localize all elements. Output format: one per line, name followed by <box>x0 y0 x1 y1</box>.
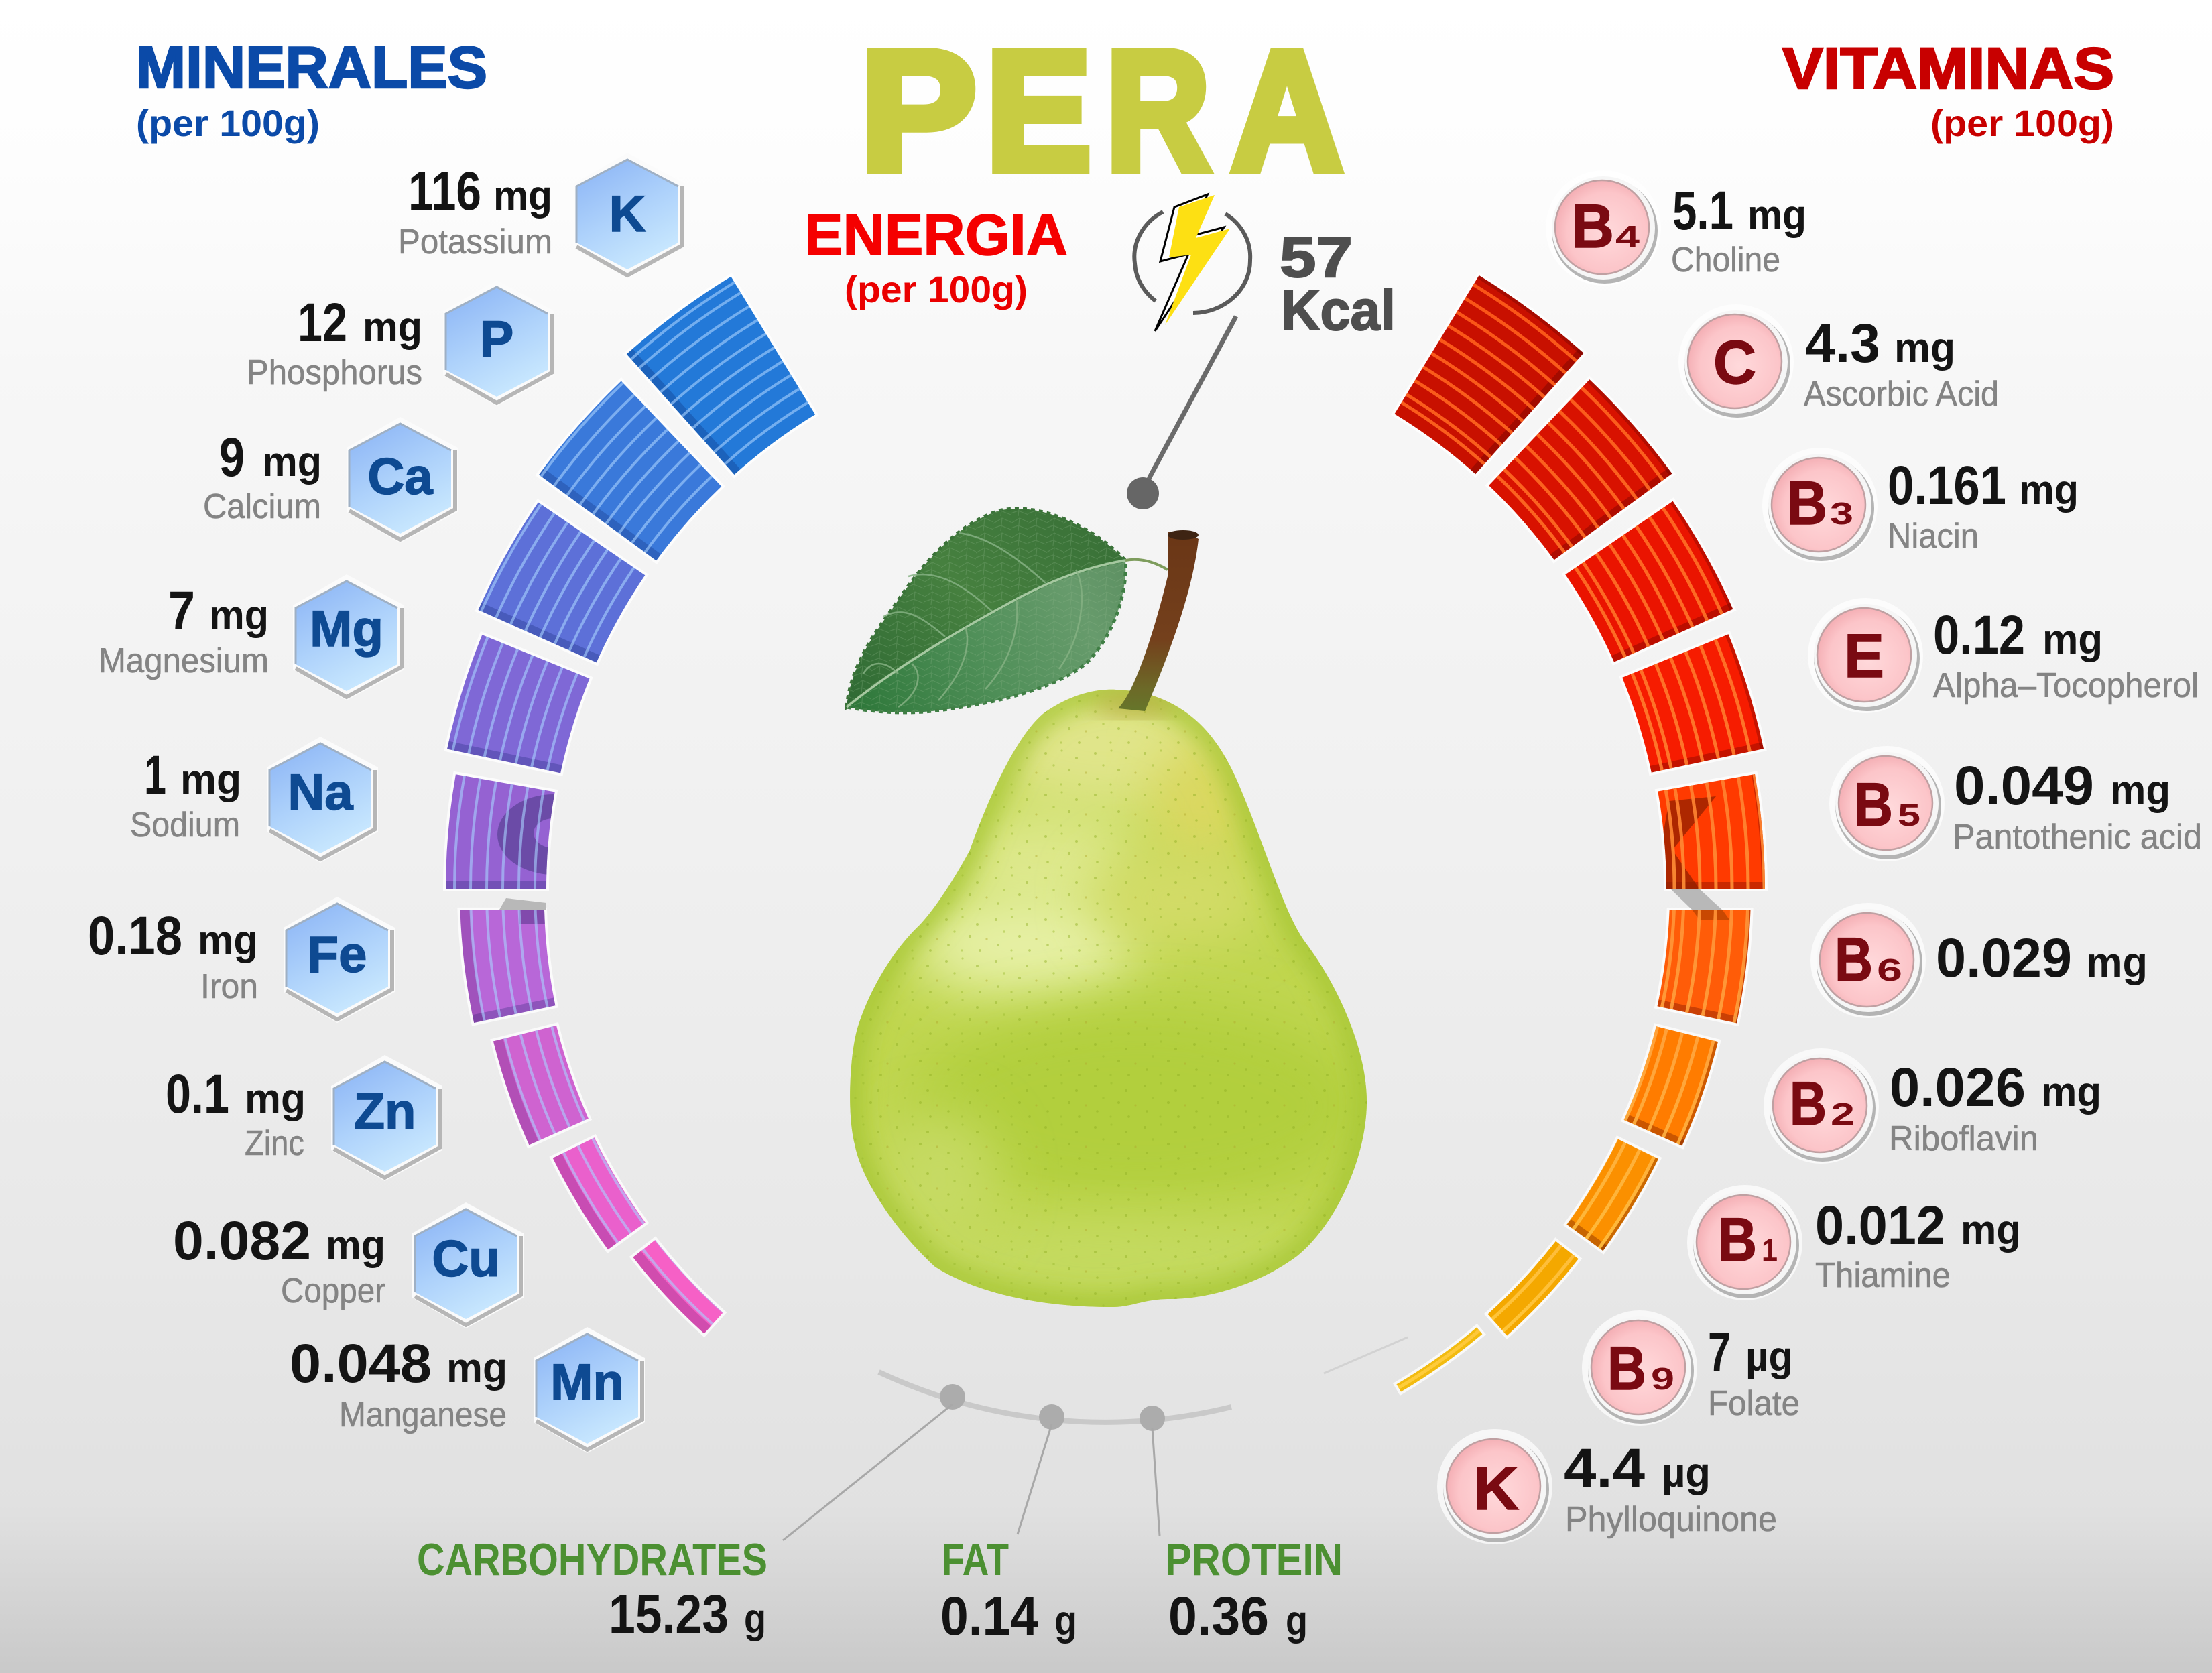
mineral: sodium: Sodium <box>130 806 240 845</box>
mineral: manganese: mg <box>446 1345 507 1391</box>
vitamin: b1 thiamine: B <box>1718 1206 1757 1274</box>
vitamin: c ascorbic acid <box>1678 304 1999 420</box>
mineral: phosphorus: P <box>480 311 513 368</box>
bar: alpha tocopherol <box>1622 634 1764 773</box>
vitamin: b4 choline: 5.1 <box>1672 180 1733 241</box>
mineral: calcium: mg <box>262 439 322 485</box>
mineral: iron: Fe <box>308 926 367 983</box>
title: A <box>1231 15 1343 205</box>
vitamin: b2 riboflavin: mg <box>2041 1069 2101 1115</box>
panel: vitamins header <box>1782 36 2114 144</box>
mineral: potassium <box>398 153 685 279</box>
mineral: phosphorus <box>247 280 554 406</box>
mineral: copper <box>173 1202 524 1328</box>
minerals per 100g note: (per 100g) <box>136 102 320 144</box>
mineral: potassium: Potassium <box>398 223 552 261</box>
pear body <box>845 677 1374 1314</box>
mineral: calcium: Calcium <box>203 487 321 526</box>
watermark fragment between sodium and iron bars <box>499 898 546 910</box>
vitamin: b5 pantothenic acid: 0.049 <box>1954 755 2094 816</box>
vitamin: b9 folate: 9 <box>1651 1361 1674 1396</box>
mineral: iron <box>88 897 395 1023</box>
mineral: calcium: Ca <box>367 448 433 505</box>
bar: folate <box>1487 1241 1579 1336</box>
vitamin: b4 choline <box>1546 170 1806 286</box>
macronutrient: protein: 0.36 <box>1168 1586 1269 1647</box>
vitamin: b6: 0.029 <box>1936 928 2072 989</box>
vitamin: e alpha tocopherol <box>1808 598 2199 713</box>
vitamin: b1 thiamine: mg <box>1961 1207 2021 1253</box>
vitamin: b3 niacin: mg <box>2019 467 2079 513</box>
mineral: copper: Cu <box>432 1231 500 1288</box>
mineral: copper: 0.082 <box>173 1211 311 1272</box>
macronutrient: protein: g <box>1286 1598 1308 1644</box>
vitamin: b2 riboflavin: Riboflavin <box>1889 1119 2038 1158</box>
minerals heading: MINERALES <box>136 34 487 101</box>
vitamin: b3 niacin: 3 <box>1830 496 1853 531</box>
icon: lightning bolt in ring <box>1134 194 1250 331</box>
panel: macronutrients <box>417 1337 1408 1647</box>
mineral: manganese: 0.048 <box>290 1333 432 1394</box>
chart: minerals ring bars <box>446 277 815 1334</box>
bar: zinc <box>493 1026 589 1145</box>
macronutrient: carbohydrates: CARBOHYDRATES <box>417 1534 767 1585</box>
bar: potassium <box>627 277 815 475</box>
bar: ascorbic acid <box>1489 379 1672 560</box>
vitamin: e alpha tocopherol: 0.12 <box>1933 605 2025 666</box>
mineral: zinc: Zn <box>354 1083 416 1140</box>
vitamin: b9 folate: Folate <box>1708 1384 1800 1423</box>
chart detail: minerals bar shading, stripes and watermark <box>446 282 808 1334</box>
illustration: pear with leaf <box>845 509 1374 1314</box>
list: minerals <box>88 153 685 1453</box>
vitamin: b6 <box>1810 903 2148 1018</box>
macronutrient: fat: g <box>1054 1598 1077 1644</box>
bar: sodium <box>446 774 555 889</box>
list: vitamins <box>1437 170 2202 1544</box>
mineral: magnesium: Magnesium <box>99 641 269 680</box>
bar: riboflavin <box>1624 1026 1718 1146</box>
leaf <box>847 509 1125 712</box>
energy value: 57 <box>1280 226 1353 289</box>
vitamin: b2 riboflavin: 0.026 <box>1890 1057 2026 1118</box>
bar: calcium <box>479 503 645 662</box>
vitamin: b2 riboflavin <box>1764 1048 2101 1164</box>
energy heading: ENERGIA <box>804 203 1068 267</box>
title: E <box>986 15 1091 205</box>
bar: thiamine <box>1566 1139 1658 1251</box>
bar: niacin <box>1565 501 1733 662</box>
bar: phylloquinone <box>1396 1327 1482 1391</box>
vitamin: b5 pantothenic acid: Pantothenic acid <box>1953 818 2202 857</box>
vitamin: k phylloquinone: µg <box>1662 1450 1711 1496</box>
bar: choline <box>1394 275 1583 474</box>
vitamin: k phylloquinone <box>1437 1429 1777 1544</box>
mineral: sodium: Na <box>288 764 353 821</box>
mineral: manganese <box>290 1327 645 1453</box>
vitamin: b5 pantothenic acid: mg <box>2110 767 2170 814</box>
vitamin: e alpha tocopherol: E <box>1844 622 1884 690</box>
vitamin: k phylloquinone: K <box>1473 1454 1519 1523</box>
title: R <box>1106 15 1210 205</box>
energy pointer line and dot <box>1127 316 1236 509</box>
bar: copper <box>553 1137 646 1249</box>
vitamin: b3 niacin <box>1762 448 2079 563</box>
vitamin: b3 niacin: 0.161 <box>1888 455 2006 516</box>
vitamin: b3 niacin: B <box>1787 469 1827 538</box>
mineral: phosphorus: mg <box>363 304 422 351</box>
bar: b6 <box>1657 910 1751 1023</box>
macronutrient: carbohydrates <box>417 1534 767 1645</box>
panel: energy <box>804 194 1396 509</box>
mineral: phosphorus: Phosphorus <box>247 353 422 392</box>
vitamin: c ascorbic acid: Ascorbic Acid <box>1804 375 1999 414</box>
vitamins per 100g note: (per 100g) <box>1930 102 2114 144</box>
vitamin: b1 thiamine <box>1687 1185 2021 1300</box>
vitamin: c ascorbic acid: C <box>1713 328 1756 397</box>
mineral: magnesium: mg <box>209 593 269 639</box>
mineral: sodium: mg <box>180 757 241 803</box>
bar: phosphorus <box>539 381 721 560</box>
mineral: copper: Copper <box>281 1272 385 1310</box>
watermark fragment between b5 and b6 bars <box>1670 889 1723 910</box>
bar: manganese <box>633 1240 723 1334</box>
macronutrient arc with nodes <box>783 1337 1408 1540</box>
vitamin: b9 folate: 7 <box>1708 1322 1731 1383</box>
macronutrient: carbohydrates: 15.23 <box>609 1584 729 1645</box>
vitamin: b6: 6 <box>1877 952 1902 987</box>
mineral: calcium <box>203 417 458 543</box>
macronutrient: fat: FAT <box>942 1534 1009 1585</box>
bar: magnesium <box>447 635 590 773</box>
mineral: sodium: 1 <box>144 745 166 806</box>
vitamin: b1 thiamine: 1 <box>1762 1233 1778 1267</box>
vitamin: b4 choline: Choline <box>1671 241 1780 280</box>
vitamin: b4 choline: 4 <box>1615 219 1640 254</box>
energy value <box>1280 226 1396 342</box>
mineral: calcium: 9 <box>219 427 245 488</box>
vitamin: b6: mg <box>2086 940 2148 986</box>
vitamin: k phylloquinone: 4.4 <box>1564 1438 1645 1499</box>
bar: pantothenic acid <box>1658 774 1765 889</box>
vitamin: b2 riboflavin: 2 <box>1831 1097 1855 1131</box>
vitamin: b5 pantothenic acid: B <box>1854 771 1893 839</box>
mineral: potassium: mg <box>493 173 552 219</box>
chart detail: vitamins bar shading, stripes and watermark <box>1398 275 1765 1389</box>
vitamin: b1 thiamine: Thiamine <box>1815 1256 1951 1295</box>
mineral: manganese: Mn <box>550 1354 624 1411</box>
mineral: potassium: K <box>609 186 646 243</box>
bar: iron <box>460 910 555 1023</box>
vitamin: b9 folate: B <box>1607 1335 1646 1403</box>
vitamin: b2 riboflavin: B <box>1790 1070 1827 1138</box>
mineral: phosphorus: 12 <box>298 292 347 353</box>
vitamin: k phylloquinone: Phylloquinone <box>1565 1500 1777 1539</box>
energy value: Kcal <box>1281 279 1396 342</box>
mineral: zinc: mg <box>245 1076 306 1122</box>
chart: vitamins ring bars <box>1394 275 1765 1391</box>
mineral: iron: 0.18 <box>88 906 182 967</box>
vitamin: b9 folate: µg <box>1745 1334 1793 1380</box>
vitamin: b4 choline: B <box>1571 192 1614 261</box>
mineral: manganese: Manganese <box>339 1396 507 1434</box>
vitamin: e alpha tocopherol: Alpha–Tocopherol <box>1933 666 2199 705</box>
vitamin: e alpha tocopherol: mg <box>2042 617 2103 663</box>
mineral: zinc: Zinc <box>245 1124 304 1163</box>
mineral: zinc: 0.1 <box>166 1064 229 1125</box>
vitamin: b1 thiamine: 0.012 <box>1815 1195 1945 1256</box>
vitamin: b4 choline: mg <box>1747 192 1806 239</box>
mineral: copper: mg <box>326 1223 385 1269</box>
energy per 100g note: (per 100g) <box>845 268 1028 310</box>
macronutrient: fat: 0.14 <box>940 1586 1038 1647</box>
vitamins heading: VITAMINAS <box>1782 36 2114 101</box>
vitamin: b9 folate <box>1582 1310 1800 1426</box>
vitamin: b5 pantothenic acid <box>1829 746 2202 861</box>
stem <box>1118 530 1199 711</box>
mineral: iron: mg <box>198 918 258 964</box>
macronutrient: carbohydrates: g <box>744 1596 766 1642</box>
vitamin: c ascorbic acid: mg <box>1894 325 1955 371</box>
vitamin: b5 pantothenic acid: 5 <box>1898 798 1920 832</box>
title: P <box>860 15 977 205</box>
mineral: magnesium: 7 <box>168 580 195 641</box>
mineral: magnesium: Mg <box>310 601 383 658</box>
macronutrient: protein: PROTEIN <box>1165 1534 1343 1585</box>
mineral: potassium: 116 <box>408 161 481 222</box>
mineral: sodium <box>130 737 378 863</box>
mineral: magnesium <box>99 574 404 700</box>
mineral: zinc <box>166 1055 442 1181</box>
macronutrient: fat <box>940 1534 1077 1647</box>
vitamin: b6: B <box>1835 926 1873 994</box>
leaf petiole <box>1125 560 1168 570</box>
vitamin: c ascorbic acid: 4.3 <box>1805 313 1880 374</box>
macronutrient: protein <box>1165 1534 1343 1647</box>
mineral: iron: Iron <box>200 967 258 1006</box>
vitamin: b3 niacin: Niacin <box>1888 517 1979 556</box>
panel: minerals header <box>136 34 487 144</box>
